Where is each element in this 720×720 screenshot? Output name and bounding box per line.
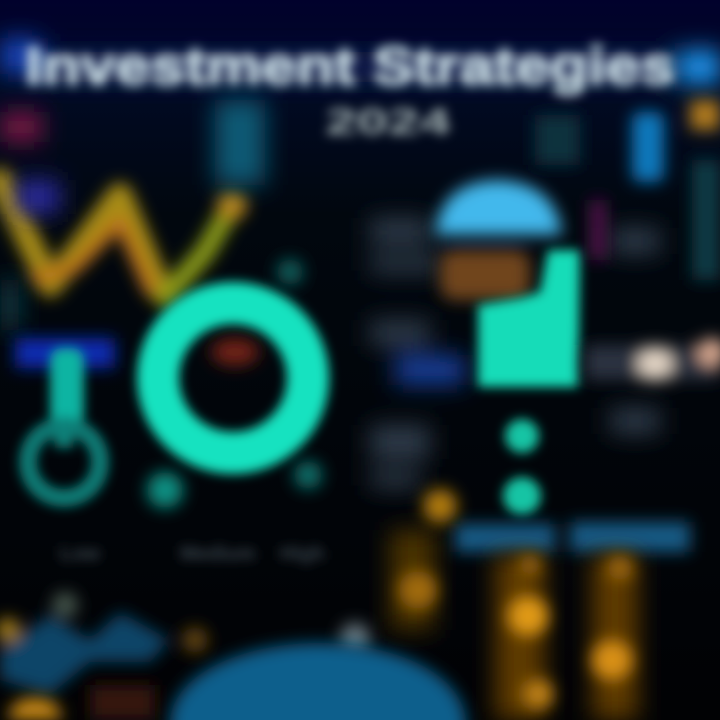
chart axis labels: Low — [60, 543, 100, 565]
icon: flask gauge — [28, 348, 100, 498]
chart axis labels — [60, 543, 324, 565]
upper right accents — [535, 100, 720, 280]
bottom blue ellipse — [170, 643, 466, 720]
blue bar left — [15, 338, 115, 368]
accent marks upper left — [0, 100, 265, 330]
line chart: yellow trend — [0, 180, 247, 298]
donut small markers — [147, 259, 322, 508]
connector dots — [503, 419, 541, 515]
chart axis labels: Medium — [180, 543, 256, 565]
blue label band — [455, 522, 690, 552]
donut centre accent — [211, 338, 259, 366]
title: Investment Strategies — [25, 37, 675, 96]
right panel text blocks — [370, 218, 660, 488]
donut chart — [158, 303, 308, 453]
chart axis labels: High — [280, 543, 324, 565]
arch icon — [435, 180, 562, 300]
bottom left blue shapes — [0, 592, 370, 695]
bottom gold accents — [8, 685, 155, 720]
title banner glow — [0, 38, 720, 84]
teal bar chart — [478, 250, 580, 387]
golden columns — [390, 530, 638, 720]
subtitle: 2024 — [326, 101, 450, 142]
golden highlights — [399, 489, 632, 709]
right legend dots — [585, 338, 720, 381]
title — [25, 37, 675, 142]
